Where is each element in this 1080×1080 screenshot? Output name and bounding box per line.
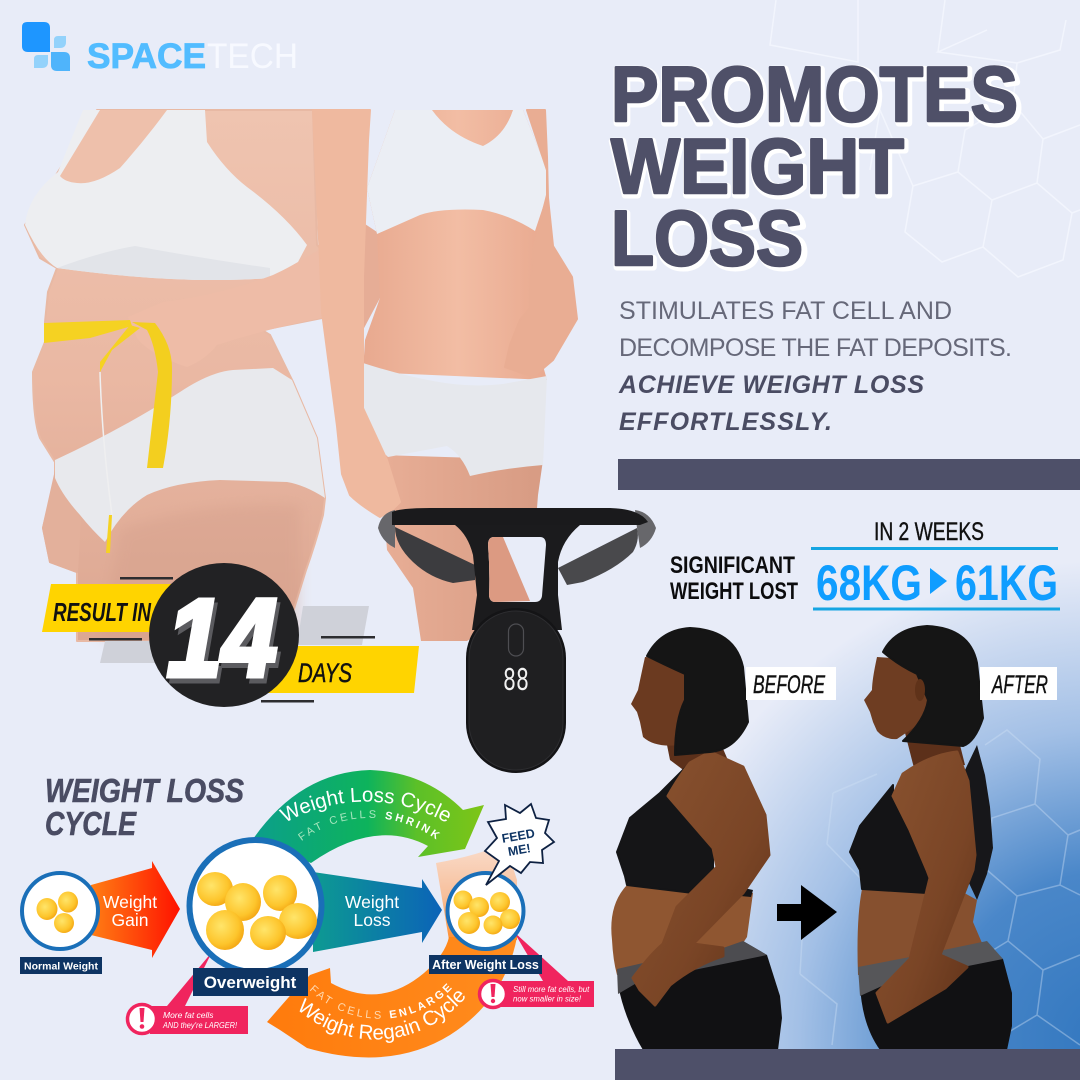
divider bar — [618, 459, 1080, 490]
arc guide: fat cells shrink — [278, 818, 462, 866]
left woman body — [25, 110, 325, 641]
right woman torso — [363, 110, 553, 380]
arrow: weight loss — [313, 872, 442, 952]
dash lines — [89, 577, 375, 702]
description text: ACHIEVE WEIGHT LOSS — [618, 371, 924, 399]
logo: SpaceTech: TECH — [207, 37, 298, 76]
description text: STIMULATES FAT CELL AND — [619, 297, 952, 325]
arc guide: fat cells enlarge — [285, 952, 475, 1019]
arrow: weight gain — [91, 861, 180, 958]
description text — [618, 297, 1012, 436]
heading outline — [612, 52, 1021, 284]
arrow: before to after — [777, 885, 837, 940]
digital display: 88 — [503, 663, 529, 700]
left woman underwear — [55, 368, 325, 542]
heading outline: WEIGHT — [612, 124, 906, 212]
number 14: 14 — [167, 577, 277, 700]
arc text: weight loss cycle: Weight Loss Cycle — [278, 788, 450, 822]
arrow text: weight gain: Gain — [112, 910, 148, 930]
strap opening — [488, 537, 546, 602]
label: after: AFTER — [991, 671, 1048, 699]
waistband — [858, 941, 1003, 996]
arc guide: weight regain cycle — [266, 963, 486, 1039]
right woman legs — [380, 455, 543, 641]
heading: weight loss cycle: WEIGHT LOSS — [45, 772, 244, 809]
stat: significant weight lost — [670, 518, 1060, 611]
label: after weight loss — [429, 955, 542, 974]
stat: significant weight lost: SIGNIFICANT — [670, 552, 795, 579]
belly — [611, 880, 753, 975]
bra back band — [730, 886, 753, 897]
photo: after woman — [850, 626, 1012, 1050]
speech burst: feed me: FEED — [501, 826, 536, 846]
left woman bra shading — [57, 246, 270, 280]
label: normal weight: Normal Weight — [24, 960, 98, 972]
leggings — [618, 941, 782, 1050]
heading: weight loss cycle: CYCLE — [45, 805, 137, 842]
neck — [665, 730, 730, 775]
leggings — [860, 945, 1012, 1050]
photo: waist comparison — [25, 110, 577, 641]
arrow: weight regain cycle — [267, 937, 517, 1057]
arrow text: weight gain — [103, 892, 157, 930]
face — [864, 657, 930, 739]
heading outline: PROMOTES — [612, 52, 1021, 140]
circle: normal weight cells — [22, 873, 98, 949]
stat: significant weight lost: IN 2 WEEKS — [874, 518, 984, 546]
label: after — [980, 667, 1057, 700]
belly — [858, 885, 985, 975]
stat: significant weight lost: WEIGHT LOST — [670, 578, 798, 605]
back and arm — [877, 752, 975, 1022]
right woman back — [362, 222, 380, 330]
top strap — [392, 508, 648, 525]
description text: DECOMPOSE THE FAT DEPOSITS. — [619, 334, 1012, 362]
logo: SpaceTech: SPACE — [87, 37, 206, 76]
left woman hand — [43, 470, 80, 572]
bottom bar — [615, 1049, 1080, 1080]
speech burst: feed me — [485, 804, 554, 885]
arrow text: weight loss: Weight — [345, 892, 399, 912]
button — [508, 624, 524, 656]
label: result in: RESULT IN — [53, 597, 152, 627]
heading: weight loss cycle — [45, 772, 244, 842]
label: before — [746, 667, 836, 700]
arc guide: weight loss cycle — [241, 802, 491, 860]
callout: still more fat cells: now smaller in size! — [513, 994, 582, 1004]
black circle — [149, 563, 299, 707]
ear — [915, 679, 925, 701]
back and arm — [633, 752, 769, 1005]
bra — [617, 763, 713, 893]
heading fill: WEIGHT — [611, 122, 904, 210]
label: overweight: Overweight — [204, 973, 297, 992]
device: posture neck device — [378, 508, 656, 773]
stat: significant weight lost: 68KG — [816, 555, 922, 611]
body — [466, 608, 566, 773]
back bra and straps — [965, 745, 993, 900]
callout: more fat cells: More fat cells — [163, 1010, 214, 1020]
speech burst: feed me: ME! — [507, 841, 532, 859]
measuring tape — [44, 320, 172, 553]
left woman leg shading — [100, 504, 300, 640]
callout line: after loss — [514, 932, 568, 981]
right woman right arm and hand — [505, 110, 577, 377]
diagram: weight loss cycle — [20, 770, 594, 1058]
number shadow: 14 — [170, 582, 280, 705]
label: after weight loss: After Weight Loss — [432, 958, 539, 972]
result badge: 14 days — [42, 563, 419, 707]
arrow text: weight loss — [345, 892, 399, 930]
face — [631, 657, 700, 746]
arrow: weight loss cycle — [253, 770, 484, 863]
bottom yellow band — [262, 646, 419, 693]
circle: after weight loss cells — [448, 873, 524, 949]
arrow text: weight gain: Weight — [103, 892, 157, 912]
hair — [647, 628, 748, 755]
arc text: fat cells shrink: FAT CELLS SHRINK — [298, 810, 440, 841]
photo: before woman — [611, 628, 782, 1050]
left woman forearm and hand — [128, 248, 322, 367]
heading — [611, 50, 1021, 284]
leg through opening — [488, 537, 530, 602]
left wing — [395, 527, 475, 583]
left woman bra — [25, 110, 307, 280]
callout line: overweight — [167, 952, 212, 1006]
callout: still more fat cells — [480, 980, 594, 1008]
right woman left arm and hand — [313, 110, 400, 517]
label: before: BEFORE — [753, 671, 825, 699]
arrow text: weight loss: Loss — [354, 910, 391, 930]
label: overweight — [193, 968, 308, 996]
callout: more fat cells — [128, 1004, 248, 1034]
left woman neckline — [60, 110, 167, 183]
heading fill — [611, 50, 1018, 282]
strap ends — [378, 510, 656, 548]
heading fill: LOSS — [611, 194, 803, 282]
neck piece — [455, 525, 580, 630]
top yellow band — [42, 584, 180, 632]
circle: overweight cells — [190, 840, 322, 972]
right woman bra — [367, 110, 547, 234]
label: days: DAYS — [298, 658, 352, 688]
logo: SpaceTech — [22, 22, 298, 76]
callout: more fat cells: AND they're LARGER! — [162, 1020, 238, 1030]
gray bands — [297, 606, 369, 645]
front bra — [850, 785, 930, 893]
label: normal weight — [20, 957, 102, 974]
description text: EFFORTLESSLY. — [619, 408, 832, 436]
hair — [883, 626, 983, 746]
arc text: fat cells enlarge: FAT CELLS ENLARGE — [310, 983, 452, 1019]
arrow: weight regain cycle tail — [436, 843, 517, 940]
callout: still more fat cells: Still more fat cells, but — [513, 985, 590, 994]
neck — [903, 725, 965, 772]
right woman underwear — [363, 363, 547, 476]
right wing — [558, 528, 638, 585]
heading fill: PROMOTES — [611, 50, 1018, 138]
waistband — [617, 941, 767, 994]
heading outline: LOSS — [612, 196, 807, 284]
arc text: weight regain cycle: Weight Regain Cycle — [300, 991, 465, 1043]
